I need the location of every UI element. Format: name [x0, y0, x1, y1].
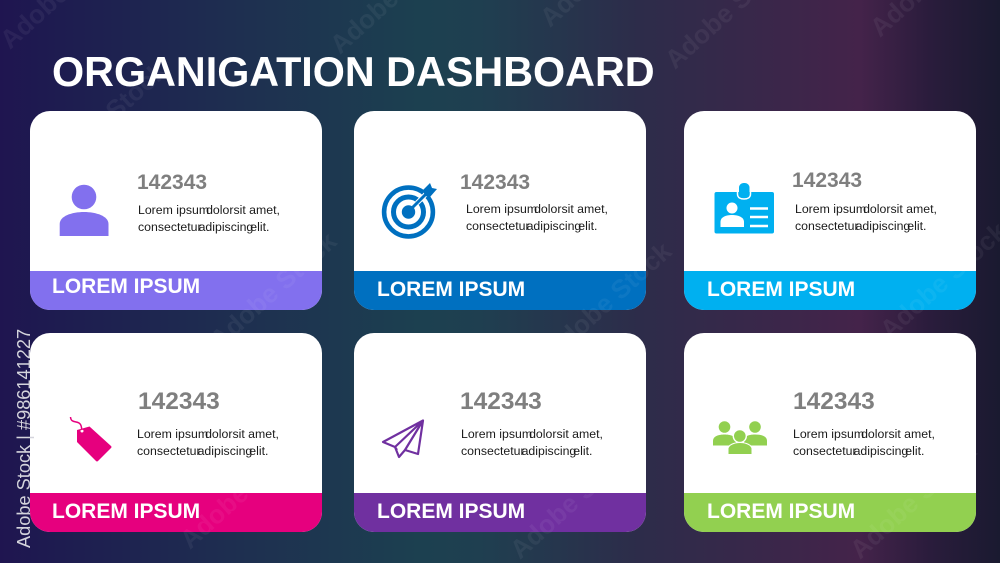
panel: target card [354, 111, 646, 310]
icon: paper plane [382, 419, 424, 458]
number: 142343 [138, 388, 220, 415]
text block: Lorem ipsumdolorsit amet, [138, 203, 280, 217]
text block: consecteturadipiscingelit. [461, 444, 592, 458]
text block [461, 427, 603, 458]
label bar [684, 271, 976, 310]
label bar: LOREM IPSUM [707, 500, 855, 523]
text: Adobe Stock [174, 425, 313, 554]
text: Adobe Stock [539, 235, 678, 364]
text block: Lorem ipsumdolorsit amet, [466, 202, 608, 216]
icon: price tag [70, 417, 112, 462]
panel: tag card [30, 333, 322, 532]
text: Adobe Stock [844, 435, 983, 563]
text: Adobe Stock [34, 55, 173, 184]
watermark credit: Adobe Stock | #986141227 [14, 329, 34, 548]
icon: team [713, 421, 767, 454]
title: ORGANIGATION DASHBOARD [52, 49, 655, 95]
icon: target [382, 183, 437, 239]
text block: consecteturadipiscingelit. [137, 444, 268, 458]
label bar: LOREM IPSUM [377, 278, 525, 301]
text block [137, 427, 279, 458]
number: 142343 [460, 388, 542, 415]
text block: consecteturadipiscingelit. [795, 218, 926, 232]
panel: team card [684, 333, 976, 532]
icon: person [60, 184, 108, 236]
panel: person card [30, 111, 322, 310]
number: 142343 [793, 388, 875, 415]
label bar: LOREM IPSUM [52, 500, 200, 523]
panel: id badge card [684, 111, 976, 310]
label bar [684, 493, 976, 532]
text block: Lorem ipsumdolorsit amet, [461, 427, 603, 441]
label bar [30, 271, 322, 310]
text block: consecteturadipiscingelit. [793, 444, 924, 458]
text: Adobe Stock [504, 435, 643, 563]
label bar [354, 271, 646, 310]
number: 142343 [137, 171, 207, 194]
text block: consecteturadipiscingelit. [466, 218, 597, 232]
label bar: LOREM IPSUM [707, 278, 855, 301]
text block: Lorem ipsumdolorsit amet, [793, 427, 935, 441]
label bar [30, 493, 322, 532]
text block [138, 203, 280, 234]
icon: id badge [714, 183, 774, 234]
label bar: LOREM IPSUM [52, 275, 200, 298]
number: 142343 [460, 171, 530, 194]
label bar [354, 493, 646, 532]
text block: Lorem ipsumdolorsit amet, [795, 202, 937, 216]
text: Adobe Stock [204, 225, 343, 354]
text block [466, 202, 608, 232]
text block: Lorem ipsumdolorsit amet, [137, 427, 279, 441]
text block: consecteturadipiscingelit. [138, 220, 269, 234]
panel: paper plane card [354, 333, 646, 532]
label bar: LOREM IPSUM [377, 500, 525, 523]
text block [793, 427, 935, 458]
text block [795, 202, 937, 232]
number: 142343 [792, 169, 862, 192]
